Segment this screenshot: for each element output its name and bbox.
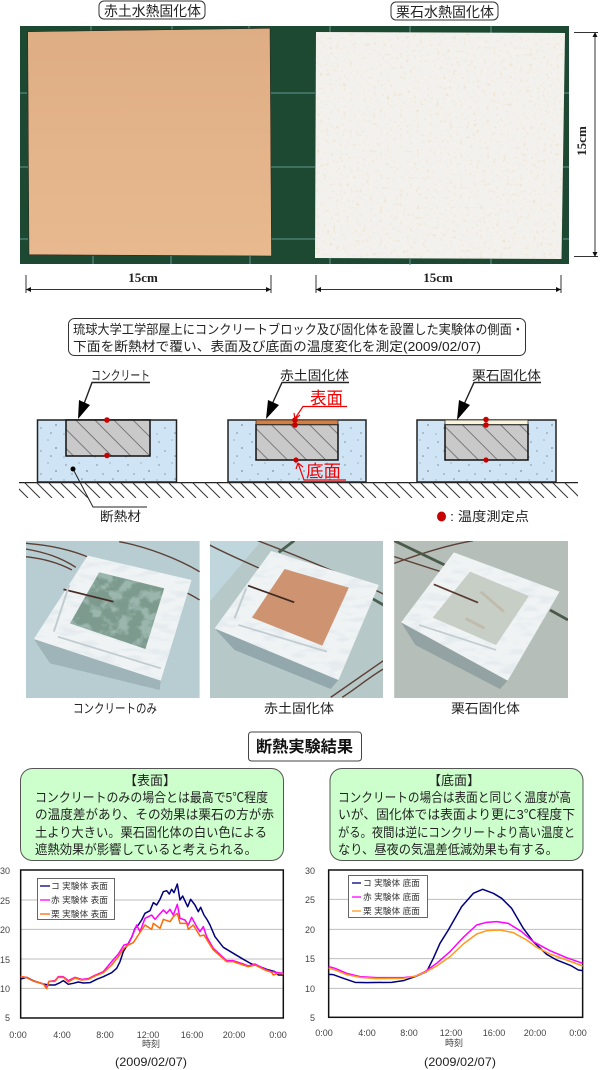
red clay tile bbox=[28, 28, 272, 256]
pebble tile bbox=[315, 32, 565, 259]
chart legend: bottom: 赤 実験体 底面 bbox=[363, 892, 421, 902]
photo caption: pebble: 栗石固化体 bbox=[451, 701, 520, 716]
callout: bottom bbox=[296, 462, 346, 481]
chart: surface temperature: 12:00 bbox=[137, 1030, 159, 1040]
photo: concrete only bbox=[26, 541, 200, 698]
dimension: tile height bbox=[574, 32, 598, 257]
panel: bottom findings: コンクリートの場合は表面と同じく温度が高 bbox=[338, 790, 571, 805]
callout: bottom: 底面 bbox=[306, 462, 341, 481]
diagram: ground bbox=[12, 482, 580, 498]
photo: two solidified tile samples on green cutting mat bbox=[20, 26, 569, 265]
chart legend: surface: 赤 実験体 表面 bbox=[51, 895, 109, 905]
chart legend: surface: 栗 実験体 表面 bbox=[51, 909, 109, 919]
label with leader: insulation: 断熱材 bbox=[100, 509, 141, 524]
legend: temperature measurement point: : 温度測定点 bbox=[450, 509, 529, 524]
chart: bottom temperature: 5 bbox=[310, 1013, 315, 1023]
caption box: 下面を断熱材で覆い、表面及び底面の温度変化を測定(2009/02/07) bbox=[73, 339, 481, 354]
dimension: left tile width: 15cm bbox=[128, 270, 158, 285]
chart: surface temperature: 8:00 bbox=[96, 1030, 114, 1040]
label with arrow: red clay: 赤土固化体 bbox=[280, 368, 349, 383]
chart: surface temperature: 30 bbox=[0, 866, 10, 876]
chart: surface temperature: 20:00 bbox=[223, 1030, 245, 1040]
chart: bottom temperature: 0:00 bbox=[569, 1028, 587, 1038]
label with arrow: red clay bbox=[266, 368, 349, 419]
heading: insulation experiment results: 断熱実験結果 bbox=[256, 737, 353, 756]
dimension: tile height: 15cm bbox=[574, 126, 589, 156]
label with leader: insulation bbox=[70, 466, 147, 524]
diagram: concrete specimen bbox=[38, 417, 176, 482]
label with arrow: concrete bbox=[78, 368, 150, 419]
panel: surface findings: 遮熱効果が影響していると考えられる。 bbox=[35, 842, 257, 857]
panel: bottom findings bbox=[330, 768, 583, 860]
chart legend: bottom bbox=[348, 876, 428, 918]
chart legend: bottom: コ 実験体 底面 bbox=[363, 878, 421, 888]
chart legend: surface bbox=[38, 878, 114, 920]
chart: surface temperature: 15 bbox=[0, 955, 10, 965]
panel: bottom findings: なり、昼夜の気温差低減効果も有する。 bbox=[338, 842, 558, 857]
chart: bottom temperature: 10 bbox=[305, 984, 315, 994]
chart: bottom temperature: 20 bbox=[305, 925, 315, 935]
temperature points bbox=[104, 417, 110, 458]
callout: surface: 表面 bbox=[310, 389, 343, 408]
temperature points bbox=[292, 417, 299, 463]
chart: surface temperature: 16:00 bbox=[181, 1030, 203, 1040]
chart: surface temperature: 時刻 bbox=[142, 1039, 160, 1049]
diagram: red clay specimen bbox=[228, 417, 366, 482]
chart: surface temperature: 0:00 bbox=[269, 1030, 287, 1040]
chart: bottom temperature: 12:00 bbox=[440, 1028, 462, 1038]
chart: bottom temperature: 時刻 bbox=[445, 1038, 463, 1048]
dimension: right tile width: 15cm bbox=[423, 270, 453, 285]
panel: surface findings: の温度差があり、その効果は栗石の方が赤 bbox=[35, 807, 274, 822]
photo: red clay solidified body bbox=[210, 541, 383, 698]
chart: surface temperature bbox=[0, 866, 287, 1049]
diagram: pebble specimen bbox=[417, 417, 556, 482]
chart: surface temperature: 20 bbox=[0, 925, 10, 935]
panel: surface findings: 土より大きい。栗石固化体の白い色による bbox=[35, 825, 267, 840]
heading: insulation experiment results bbox=[248, 732, 362, 761]
dimension: right tile width bbox=[316, 270, 561, 293]
label: red clay solidified body: 赤土水熱固化体 bbox=[104, 3, 201, 19]
chart: surface temperature: 0:00 bbox=[9, 1030, 27, 1040]
chart date: surface: (2009/02/07) bbox=[115, 1055, 187, 1069]
chart: bottom temperature: 25 bbox=[305, 895, 315, 905]
callout: surface bbox=[294, 389, 347, 419]
chart: bottom temperature: 15 bbox=[305, 954, 315, 964]
dimension: left tile width bbox=[26, 270, 271, 293]
chart legend: bottom: 栗 実験体 底面 bbox=[363, 906, 421, 916]
label with arrow: concrete: コンクリート bbox=[91, 368, 150, 383]
chart: surface temperature: 25 bbox=[0, 896, 10, 906]
chart: surface temperature: 5 bbox=[5, 1013, 10, 1023]
caption box: 琉球大学工学部屋上にコンクリートブロック及び固化体を設置した実験体の側面・ bbox=[73, 322, 524, 337]
chart: bottom temperature: 8:00 bbox=[400, 1028, 418, 1038]
label with arrow: pebble: 栗石固化体 bbox=[472, 368, 541, 383]
photo caption: red clay: 赤土固化体 bbox=[264, 701, 334, 716]
chart: bottom temperature: 0:00 bbox=[315, 1028, 333, 1038]
panel: bottom findings: いが、固化体では表面より更に3℃程度下 bbox=[338, 807, 575, 822]
label with arrow: pebble bbox=[457, 368, 541, 420]
chart: bottom temperature bbox=[305, 866, 587, 1048]
temperature points bbox=[483, 417, 489, 463]
chart: surface temperature: 4:00 bbox=[53, 1030, 71, 1040]
photo caption: concrete only: コンクリートのみ bbox=[73, 701, 157, 716]
chart: bottom temperature: 16:00 bbox=[483, 1028, 505, 1038]
panel: surface findings: 【表面】 bbox=[124, 773, 176, 788]
chart date: bottom: (2009/02/07) bbox=[424, 1055, 496, 1069]
chart: surface temperature: 10 bbox=[0, 984, 10, 994]
chart: bottom temperature: 20:00 bbox=[524, 1028, 546, 1038]
chart: bottom temperature: 30 bbox=[305, 866, 315, 876]
panel: surface findings: コンクリートのみの場合とは最高で5℃程度 bbox=[35, 790, 268, 805]
chart: bottom temperature: 4:00 bbox=[358, 1028, 376, 1038]
panel: surface findings bbox=[20, 768, 284, 860]
label: pebble solidified body: 栗石水熱固化体 bbox=[396, 4, 494, 20]
caption box bbox=[68, 318, 526, 356]
chart legend: surface: コ 実験体 表面 bbox=[51, 881, 109, 891]
photo: pebble solidified body bbox=[394, 541, 568, 698]
panel: bottom findings: 【底面】 bbox=[428, 773, 480, 788]
